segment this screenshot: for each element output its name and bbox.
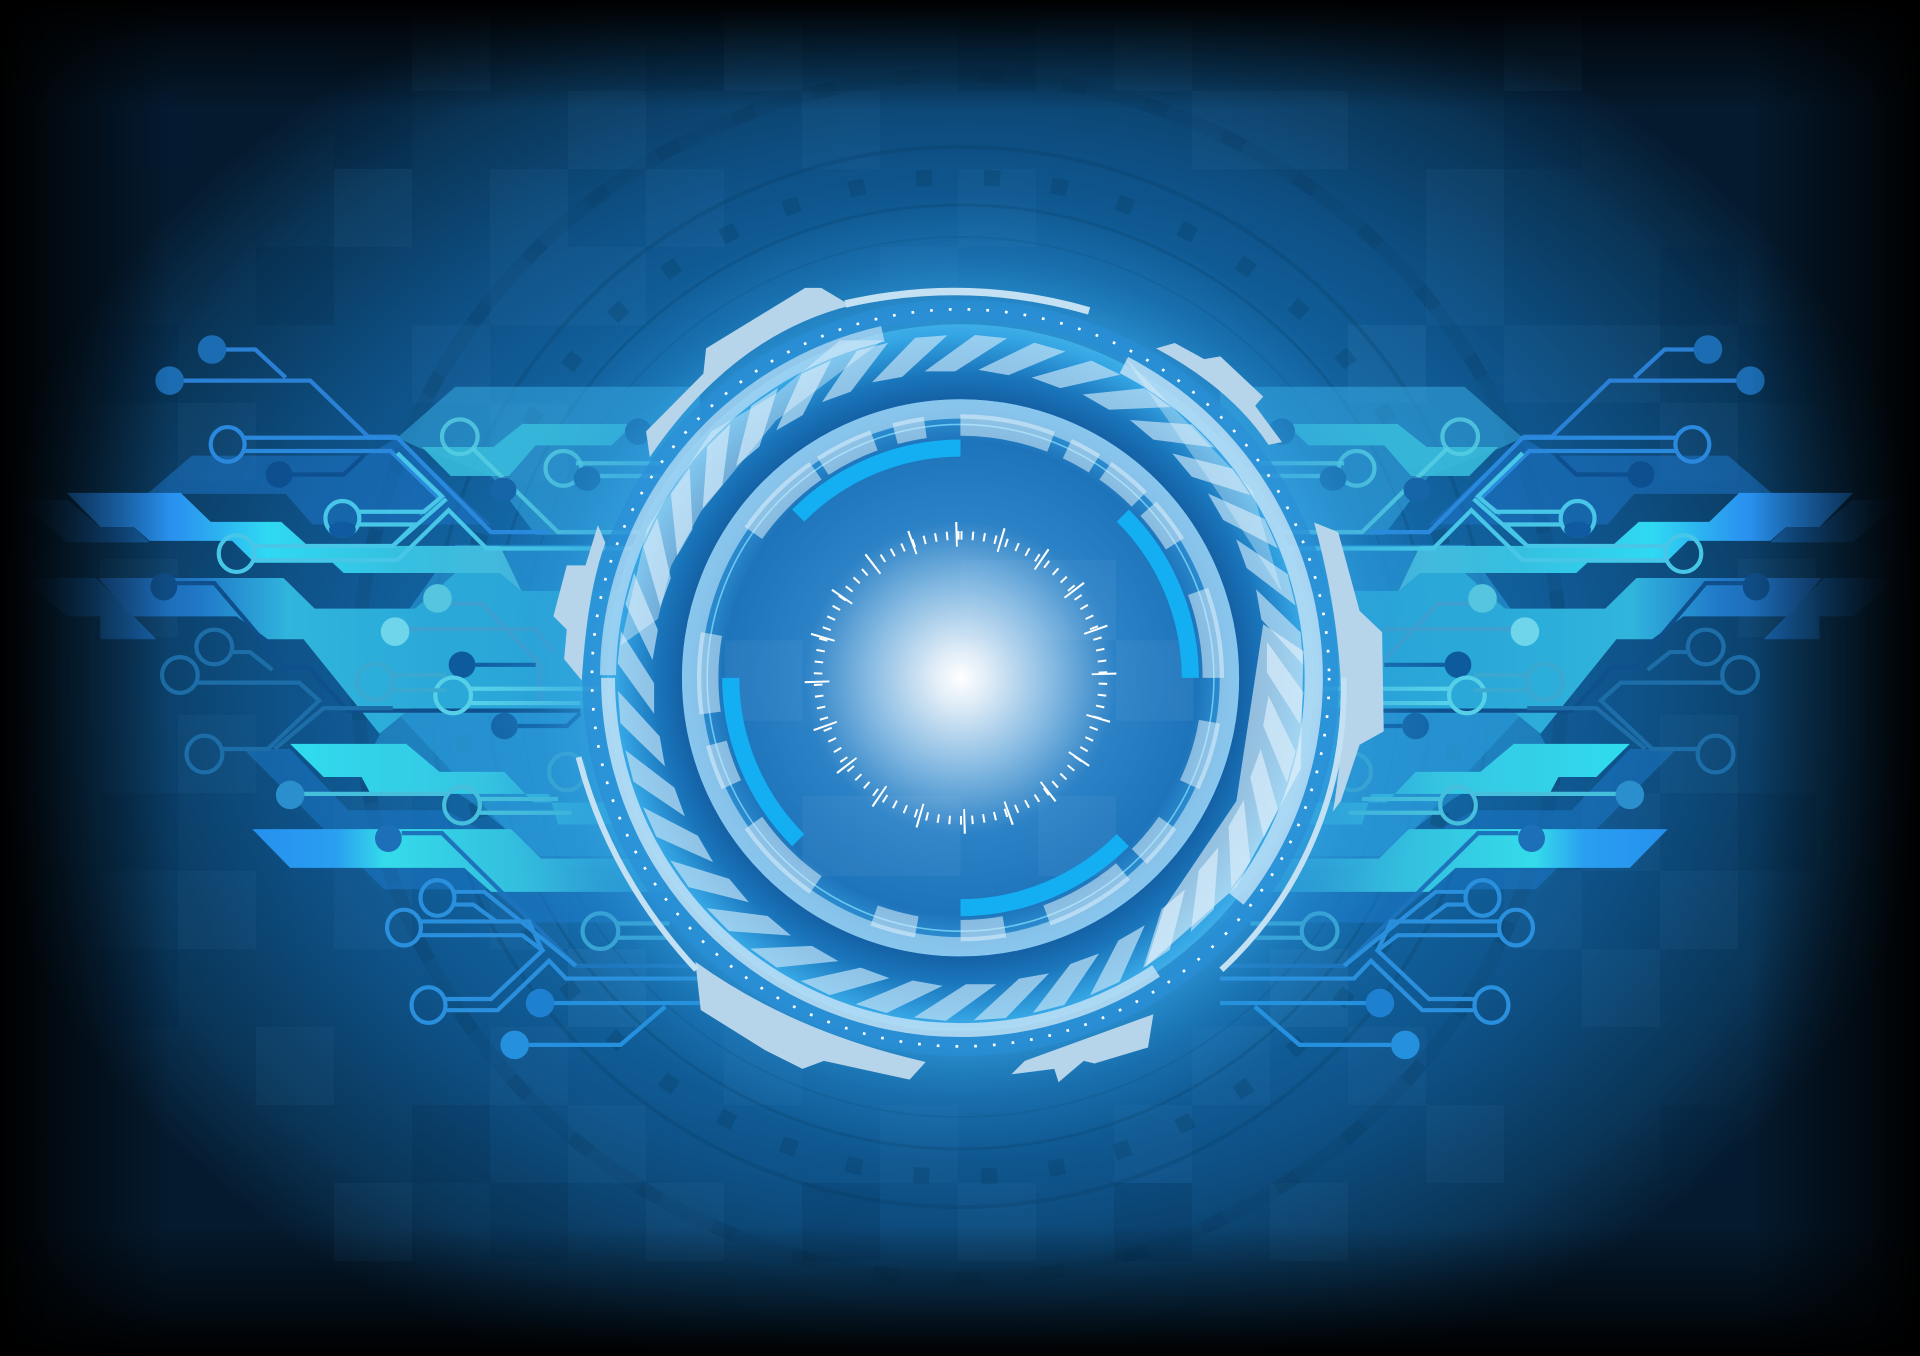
cyan arc segments <box>731 448 1190 908</box>
wing streaks <box>18 387 700 922</box>
faint disc squares <box>725 560 1194 876</box>
hatched ring base <box>607 324 1314 1031</box>
gear fragments <box>553 288 1384 1082</box>
decorative background radar rings <box>358 75 1562 1279</box>
light ring <box>608 334 1314 1030</box>
tick dial <box>817 534 1104 821</box>
inner disc <box>682 399 1239 956</box>
right circuit wing (mirror of left) <box>1220 335 1902 1059</box>
inner light ring <box>692 409 1229 947</box>
dotted ring band <box>592 309 1329 1046</box>
light ring segments <box>708 425 1213 931</box>
outer glow <box>478 196 1443 1160</box>
circuit traces <box>150 335 700 1059</box>
dotted ring <box>592 309 1329 1046</box>
left circuit wing <box>18 335 700 1059</box>
translucent highlight blades <box>620 340 1303 967</box>
thin inner ring <box>707 424 1214 931</box>
thin outer arcs <box>579 292 1344 970</box>
hatched ring strips <box>615 332 1306 1024</box>
central HUD eye <box>478 196 1443 1160</box>
